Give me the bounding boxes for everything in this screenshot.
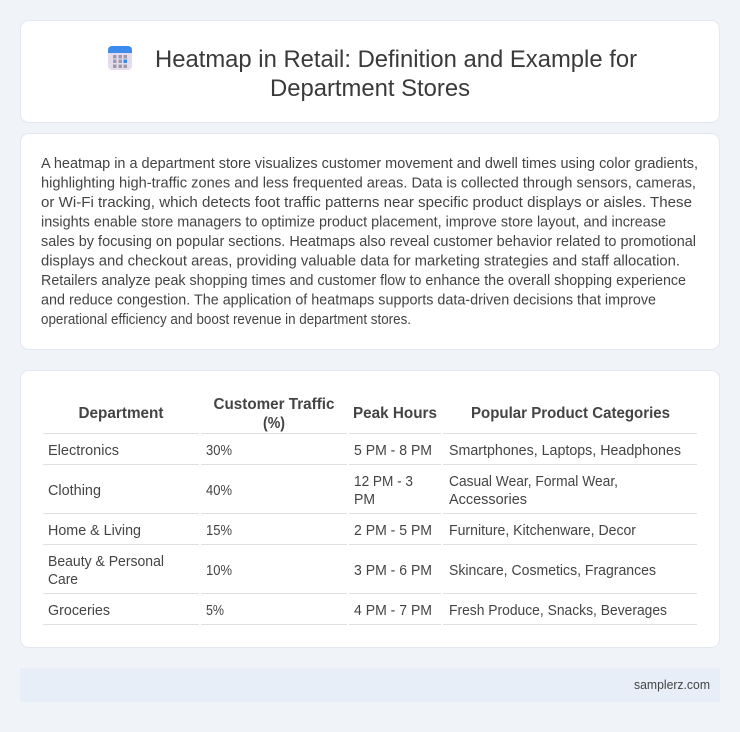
table rules xyxy=(43,433,697,625)
heading: title xyxy=(155,46,637,102)
table row: Clothing: 40% xyxy=(206,483,232,499)
table row: Groceries: 5% xyxy=(206,603,224,619)
table header: Department xyxy=(78,405,164,422)
heading: title: Heatmap in Retail: Definition and Example for xyxy=(155,46,637,73)
table row: Home & Living: 15% xyxy=(206,523,232,539)
icon: calendar grid xyxy=(108,46,132,70)
table row: Home & Living xyxy=(48,523,636,539)
table row: Home & Living: Furniture, Kitchenware, Decor xyxy=(449,523,636,539)
text block: description paragraph: or Wi-Fi tracking, which detects foot traffic patterns near specific product displays or aisles. These xyxy=(41,195,692,211)
table row: Electronics: Smartphones, Laptops, Headphones xyxy=(449,443,681,459)
text block: description paragraph: operational efficiency and boost revenue in department stores. xyxy=(41,312,411,328)
panel: title card xyxy=(20,20,720,122)
table row: Electronics: 30% xyxy=(206,443,232,459)
heading: title: Department Stores xyxy=(270,75,470,102)
panel: description xyxy=(20,134,720,350)
table row: Electronics: Electronics xyxy=(48,443,119,459)
table row: Clothing xyxy=(48,474,618,508)
panel: data table xyxy=(20,370,720,648)
table header: (%) xyxy=(263,415,285,432)
table row: Beauty & Personal Care: Care xyxy=(48,572,78,588)
table row: Clothing: 12 PM - 3 xyxy=(354,474,413,490)
footer credit: samplerz.com xyxy=(634,678,710,692)
table row: Electronics xyxy=(48,443,681,459)
footer xyxy=(20,668,720,702)
table header: Customer Traffic xyxy=(214,396,335,413)
table row: Home & Living: 2 PM - 5 PM xyxy=(354,523,432,539)
table row: Beauty & Personal Care: Skincare, Cosmetics, Fragrances xyxy=(449,563,656,579)
table row: Beauty & Personal Care: 10% xyxy=(206,563,232,579)
text block: description paragraph: sales by focusing on popular sections. Heatmaps also reveal customer behavior related to promotional xyxy=(41,234,696,250)
table row: Clothing: PM xyxy=(354,492,375,508)
text block: description paragraph: highlighting high-traffic zones and less frequented areas. Data is collected through sensors, cameras, xyxy=(41,176,696,192)
table row: Groceries xyxy=(48,603,667,619)
text block: description paragraph: A heatmap in a department store visualizes customer movement and dwell times using color gradients, xyxy=(41,156,698,172)
table header: Peak Hours xyxy=(353,405,437,422)
text block: description paragraph xyxy=(41,156,698,328)
text block: description paragraph: insights enable store managers to optimize product placement, improve store layout, and increase xyxy=(41,214,666,230)
table row: Beauty & Personal Care: 3 PM - 6 PM xyxy=(354,563,432,579)
text block: description paragraph: and reduce congestion. The application of heatmaps supports data-driven decisions that improve xyxy=(41,292,656,308)
table row: Home & Living: Home & Living xyxy=(48,523,141,539)
text block: description paragraph: Retailers analyze peak shopping times and customer flow to enhance the overall shopping experience xyxy=(41,273,686,289)
table row: Groceries: Fresh Produce, Snacks, Beverages xyxy=(449,603,667,619)
table row: Clothing: Casual Wear, Formal Wear, xyxy=(449,474,618,490)
table header: Popular Product Categories xyxy=(471,405,670,422)
table row: Groceries: Groceries xyxy=(48,603,110,619)
table header xyxy=(78,396,670,432)
table row: Groceries: 4 PM - 7 PM xyxy=(354,603,432,619)
table row: Electronics: 5 PM - 8 PM xyxy=(354,443,432,459)
table row: Beauty & Personal Care: Beauty & Personal xyxy=(48,554,164,570)
table row: Clothing: Clothing xyxy=(48,483,101,499)
table row: Clothing: Accessories xyxy=(449,492,527,508)
table row: Beauty & Personal Care xyxy=(48,554,656,588)
text block: description paragraph: displays and checkout areas, providing valuable data for marketing strategies and staff allocation. xyxy=(41,254,680,270)
